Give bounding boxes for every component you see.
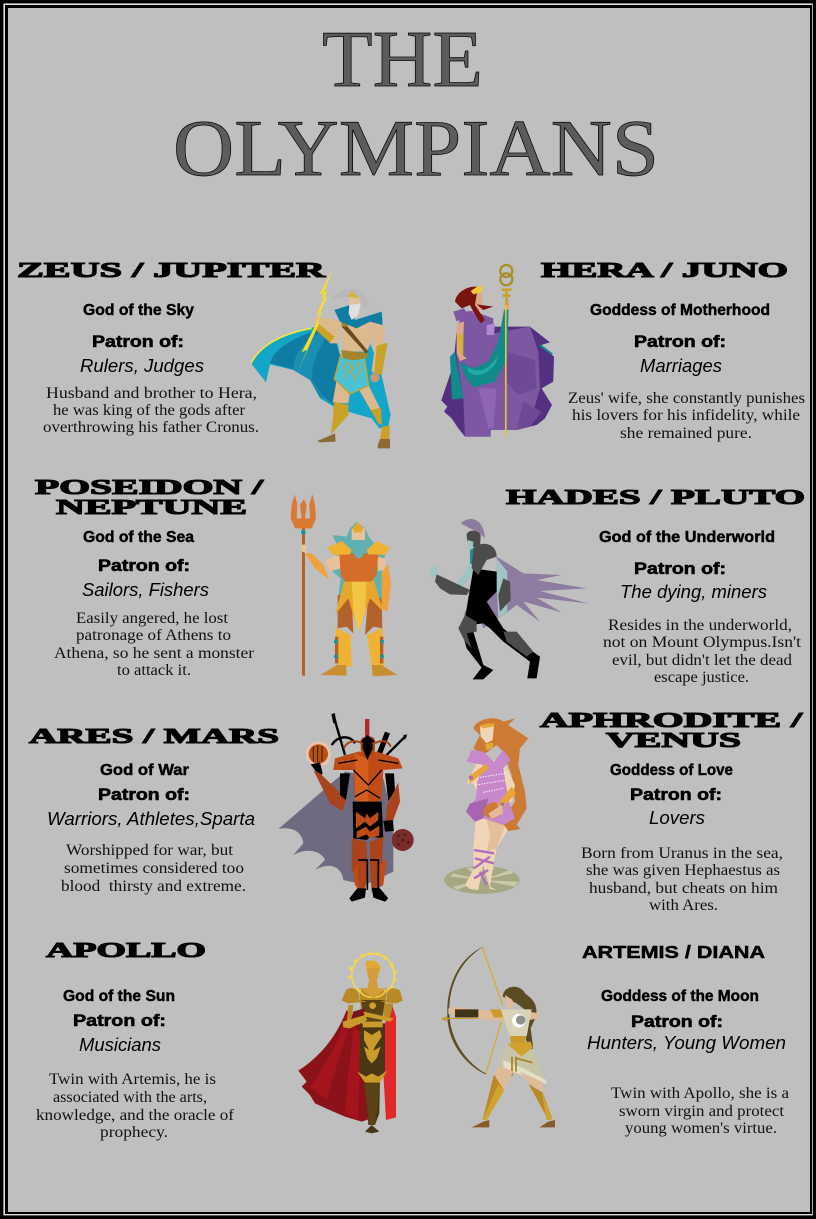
heading: Artemis: ARTEMIS / DIANA <box>582 942 765 962</box>
panel: Apollo <box>36 938 403 1141</box>
description: Ares: Worshipped for war, but <box>66 842 234 859</box>
description: Hades: not on Mount Olympus.Isn't <box>603 634 802 651</box>
domain: Hera: Goddess of Motherhood <box>590 302 770 319</box>
heading: Poseidon: NEPTUNE <box>56 495 247 519</box>
description: Apollo <box>36 1071 235 1141</box>
patron list: Hera: Marriages <box>640 356 722 376</box>
description: Hera: she remained pure. <box>620 425 752 442</box>
patron label: Zeus: Patron of: <box>92 333 184 351</box>
description: Hera <box>568 390 805 442</box>
description: Artemis: sworn virgin and protect <box>619 1103 785 1120</box>
description: Poseidon: to attack it. <box>117 662 191 679</box>
title: OLYMPIANS <box>173 105 659 193</box>
panel: Artemis <box>441 942 789 1137</box>
heading: Aphrodite <box>540 708 804 752</box>
description: Ares: sometimes considered too <box>64 860 244 877</box>
domain: Zeus: God of the Sky <box>83 302 194 319</box>
description: Zeus <box>43 385 259 436</box>
domain: Poseidon: God of the Sea <box>83 529 194 546</box>
heading: Ares: ARES / MARS <box>29 724 279 748</box>
description: Poseidon: Easily angered, he lost <box>76 610 229 627</box>
description: Hades: Resides in the underworld, <box>608 617 792 634</box>
heading: Aphrodite: APHRODITE / <box>540 708 804 732</box>
description: Aphrodite <box>581 845 783 914</box>
description: Hades: escape justice. <box>654 669 749 686</box>
patron label: Aphrodite: Patron of: <box>630 786 722 804</box>
patron label: Hades: Patron of: <box>634 560 726 578</box>
description: Apollo: prophecy. <box>100 1124 168 1141</box>
description: Aphrodite: husband, but cheats on him <box>589 880 778 897</box>
patron list: Poseidon: Sailors, Fishers <box>82 580 209 600</box>
domain: Ares: God of War <box>100 762 189 779</box>
description: Zeus: Husband and brother to Hera, <box>46 385 257 402</box>
description: Poseidon: Athena, so he sent a monster <box>54 645 255 662</box>
figure: Zeus <box>251 268 391 448</box>
description: Hades: evil, but didn't let the dead <box>612 652 792 669</box>
panel: Aphrodite <box>444 708 804 914</box>
description: Artemis: Twin with Apollo, she is a <box>611 1085 789 1102</box>
figure: Aphrodite <box>444 718 528 894</box>
panel: Hades <box>428 485 805 686</box>
figure: Artemis <box>441 946 555 1127</box>
title: THE <box>322 16 483 104</box>
description: Artemis: young women's virtue. <box>625 1120 777 1137</box>
panel: Ares <box>29 713 414 902</box>
figure: Hera <box>441 265 554 437</box>
description: Hades <box>603 617 802 686</box>
description: Poseidon: patronage of Athens to <box>76 627 231 644</box>
heading: Poseidon <box>35 475 265 519</box>
patron label: Poseidon: Patron of: <box>98 557 190 575</box>
title <box>173 16 659 193</box>
heading: Zeus: ZEUS / JUPITER <box>17 258 327 282</box>
figure: Poseidon <box>291 494 397 676</box>
description: Ares: blood thirsty and extreme. <box>61 878 246 895</box>
heading: Poseidon: POSEIDON / <box>35 475 265 499</box>
description: Apollo: knowledge, and the oracle of <box>36 1107 235 1124</box>
patron list: Apollo: Musicians <box>79 1035 161 1055</box>
description: Aphrodite: she was given Hephaestus as <box>586 862 780 879</box>
patron label: Ares: Patron of: <box>98 786 190 804</box>
patron label: Hera: Patron of: <box>634 333 726 351</box>
patron label: Artemis: Patron of: <box>631 1013 723 1031</box>
description: Zeus: he was king of the gods after <box>53 402 246 419</box>
domain: Apollo: God of the Sun <box>63 988 175 1005</box>
description: Artemis <box>611 1085 789 1137</box>
patron list: Artemis: Hunters, Young Women <box>587 1033 786 1053</box>
heading: Apollo: APOLLO <box>46 938 206 962</box>
patron list: Zeus: Rulers, Judges <box>80 356 204 376</box>
figure: Apollo <box>298 950 403 1133</box>
heading: Hera: HERA / JUNO <box>541 258 788 282</box>
domain: Hades: God of the Underworld <box>599 529 775 546</box>
description: Aphrodite: with Ares. <box>649 897 718 914</box>
panel: Poseidon <box>35 475 397 679</box>
description: Apollo: Twin with Artemis, he is <box>49 1071 216 1088</box>
description: Poseidon <box>54 610 255 679</box>
description: Ares <box>61 842 246 895</box>
heading: Hades: HADES / PLUTO <box>506 485 805 509</box>
patron list: Hades: The dying, miners <box>620 582 767 602</box>
patron label: Apollo: Patron of: <box>73 1012 166 1030</box>
panel: Hera <box>441 258 805 442</box>
description: Hera: his lovers for his infidelity, while <box>572 407 800 424</box>
description: Aphrodite: Born from Uranus in the sea, <box>581 845 783 862</box>
description: Hera: Zeus' wife, she constantly punishes <box>568 390 805 407</box>
domain: Aphrodite: Goddess of Love <box>610 762 733 779</box>
patron list: Aphrodite: Lovers <box>649 808 705 828</box>
panel: Zeus <box>17 258 391 448</box>
heading: Aphrodite: VENUS <box>606 728 741 752</box>
figure: Ares <box>278 713 414 902</box>
description: Apollo: associated with the arts, <box>53 1089 207 1106</box>
figure: Hades <box>428 519 588 679</box>
description: Zeus: overthrowing his father Cronus. <box>43 419 259 436</box>
domain: Artemis: Goddess of the Moon <box>601 988 759 1005</box>
patron list: Ares: Warriors, Athletes,Sparta <box>47 809 255 829</box>
